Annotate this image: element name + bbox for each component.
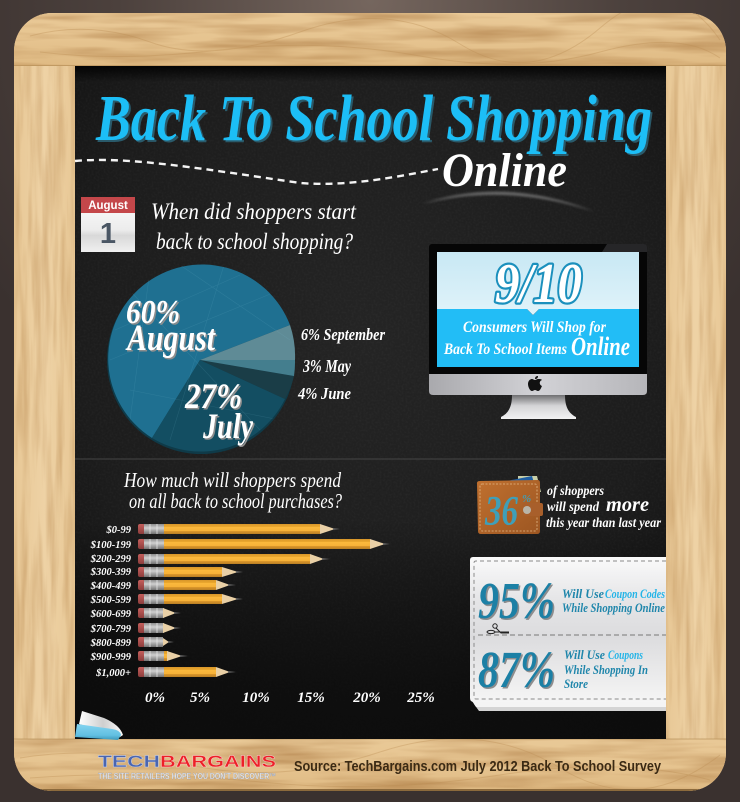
- icon: apple logo: [528, 376, 542, 391]
- stat: 87%: 87%: [478, 642, 555, 699]
- icon: scissors: [487, 624, 509, 634]
- icon: calendar August 1: [81, 197, 135, 252]
- pencil bar: $500-599: $500-599: [90, 595, 132, 606]
- slice: May 3%: [200, 360, 295, 376]
- text: 36% of shoppers will spend more: of shoppers: [547, 484, 604, 499]
- stat: 9/10: 9/10: [495, 253, 582, 315]
- pencil bar: $200-299: [90, 554, 330, 565]
- pencil bar: $600-699: $600-699: [90, 609, 132, 620]
- slice: June 4%: [200, 360, 294, 399]
- monitor chin: [429, 374, 647, 395]
- logo: TechBargains: [98, 752, 276, 781]
- icon: wallet 36%: 36: [484, 489, 518, 535]
- pie label: 27% July: July: [202, 406, 254, 446]
- pie label: 4% June: 4% June: [297, 384, 351, 403]
- pie label: 60% August: August: [125, 318, 216, 359]
- pencil bar chart: [90, 524, 435, 706]
- text: will use coupon codes: Will Use: [562, 586, 604, 601]
- x axis labels: 15%: [297, 690, 325, 706]
- pie label: 6% September: 6% September: [301, 325, 385, 344]
- pencil bar: $200-299: $200-299: [90, 554, 132, 565]
- pencil bar: $700-799: $700-799: [90, 624, 132, 635]
- slice: September 6%: [200, 325, 295, 360]
- pencil bar: $900-999: [90, 651, 188, 663]
- heading: how much will shoppers spend: [123, 468, 342, 513]
- caption: consumers will shop: Consumers Will Shop for: [463, 319, 607, 336]
- heading: how much will shoppers spend: How much will shoppers spend: [123, 468, 341, 492]
- text: will use coupons: While Shopping In: [564, 662, 648, 677]
- pencil bar: $300-399: [90, 567, 243, 578]
- pencil bar: $100-199: [90, 539, 390, 551]
- x axis labels: 10%: [242, 690, 270, 706]
- pencil bar: $400-499: $400-499: [90, 581, 132, 592]
- pencil bar: $400-499: [90, 580, 236, 592]
- caption: back to school items online: Online: [571, 332, 630, 361]
- slice: July 27%: [152, 360, 285, 452]
- logo: TechBargains: THE SITE RETAILERS HOPE YOU DON'T DISCOVER™: [98, 772, 276, 781]
- text: 36% of shoppers will spend more: will spend: [547, 500, 600, 515]
- pencil bar: $800-899: $800-899: [90, 638, 132, 649]
- text: will use coupon codes: Coupon Codes: [605, 586, 665, 601]
- pencil bar: $500-599: [90, 594, 243, 606]
- pencil bar: $100-199: $100-199: [90, 540, 132, 551]
- chalk swoosh: [422, 192, 595, 212]
- panel: chalkboard: [75, 66, 666, 739]
- pie label: 60% August: [125, 294, 216, 359]
- x axis labels: 0%: [145, 690, 165, 706]
- pencil bar: $0-99: $0-99: [106, 525, 132, 536]
- text: will use coupons: Store: [564, 676, 588, 691]
- pie label: 3% May: 3% May: [302, 356, 352, 376]
- icon: computer monitor: [429, 244, 647, 419]
- icon: chalk pieces: [75, 711, 123, 740]
- monitor bezel: [429, 244, 647, 376]
- text: will use coupons: Will Use: [564, 647, 605, 662]
- heading: when did shoppers start: When did shoppers start: [151, 199, 357, 224]
- caption: back to school items online: [443, 332, 630, 361]
- panel: coupons: [470, 557, 666, 711]
- pie label: 27% July: [184, 376, 254, 446]
- pie chart: [107, 262, 295, 454]
- pencil bar: $300-399: $300-399: [90, 567, 132, 578]
- screen lower panel: [437, 309, 639, 367]
- caption: back to school items online: Back To School Items: [443, 341, 567, 358]
- slice: August 60%: [108, 265, 290, 438]
- pencil bar: $900-999: $900-999: [90, 652, 132, 663]
- heading: when did shoppers start: [151, 199, 357, 254]
- stat: 95%: 95%: [478, 573, 555, 630]
- monitor stand: [501, 395, 576, 419]
- pencil bar: $1,000+: $1,000+: [95, 668, 131, 679]
- pencil bar: $600-699: [90, 608, 181, 620]
- dashed chalk line: [75, 160, 438, 184]
- text: 36% of shoppers will spend more: [546, 484, 661, 531]
- pencil bar: $800-899: [90, 637, 174, 649]
- pencil bar: $0-99: [106, 524, 340, 536]
- logo: TechBargains: BARGAINS: [160, 752, 276, 771]
- heading: how much will shoppers spend: on all back to school purchases?: [129, 489, 342, 513]
- text: 36% of shoppers will spend more: more: [606, 492, 649, 516]
- screen upper panel: [437, 252, 639, 309]
- text: 36% of shoppers will spend more: this year than last year: [546, 516, 661, 531]
- text: will use coupons: [564, 647, 648, 691]
- subtitle: Online: Online: [442, 144, 567, 197]
- x axis labels: 5%: [190, 690, 210, 706]
- icon: wallet 36%: %: [522, 493, 531, 505]
- text: will use coupon codes: While Shopping Online: [562, 600, 665, 615]
- icon: wallet 36%: [477, 476, 543, 535]
- x axis labels: 25%: [406, 690, 435, 706]
- pencil bar: $1,000+: [95, 667, 236, 679]
- pie label: 27% July: 27%: [184, 376, 242, 416]
- icon: calendar August 1: 1: [100, 218, 116, 250]
- text: will use coupons: Coupons: [608, 647, 643, 662]
- logo: TechBargains: TECH: [98, 752, 160, 771]
- x axis labels: [145, 690, 435, 706]
- source line: Source: TechBargains.com July 2012 Back To School Survey: [294, 758, 662, 775]
- heading: when did shoppers start: back to school shopping?: [156, 229, 353, 254]
- x axis labels: 20%: [352, 690, 381, 706]
- pencil bar: $700-799: [90, 623, 181, 635]
- text: will use coupon codes: [562, 586, 665, 615]
- pie label: 60% August: 60%: [126, 294, 180, 331]
- icon: calendar August 1: August: [88, 200, 128, 212]
